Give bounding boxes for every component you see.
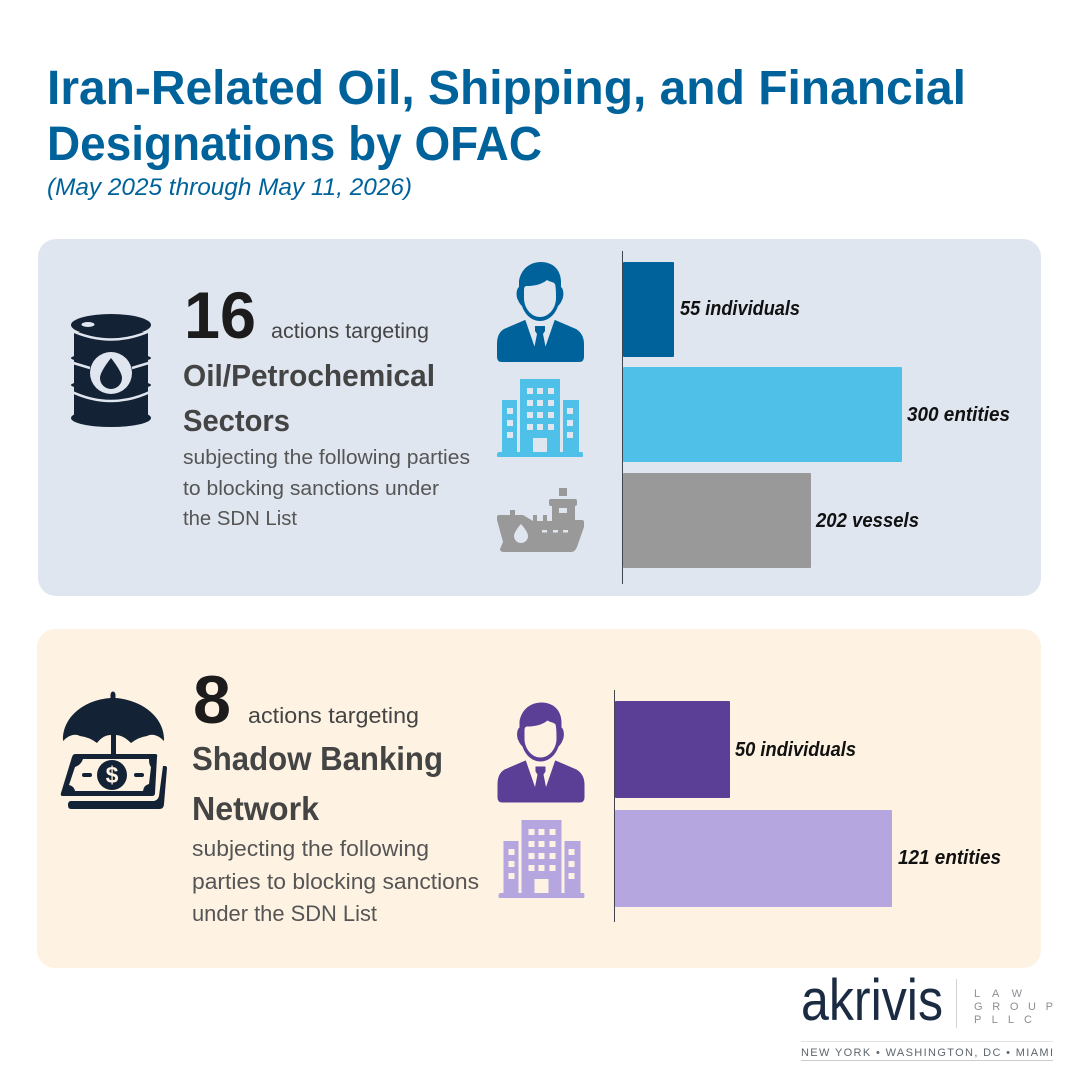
heading: shadow banking network: Network [192, 790, 320, 827]
heading: oil and petrochemical sectors [183, 358, 435, 438]
text block: oil description: the SDN List [183, 508, 297, 530]
text block: oil description: subjecting the following parties [183, 447, 470, 469]
icon: umbrella over money: $ [106, 762, 119, 788]
icon: individual person purple [498, 702, 584, 802]
text block: banking description: subjecting the following [192, 836, 429, 861]
panel: shadow banking network [37, 629, 1041, 968]
logo: akrivis law group [801, 968, 1053, 1061]
icon: umbrella over money [61, 692, 167, 809]
stat: 16 actions: actions targeting [271, 320, 429, 343]
bar: 202 vessels: 202 vessels [815, 510, 919, 532]
icon: entities building blue [497, 379, 583, 457]
bar: 121 entities [615, 810, 1001, 907]
text block: oil description: to blocking sanctions under [183, 478, 439, 500]
icon: entities building purple [498, 820, 584, 898]
title: Designations by OFAC [47, 118, 542, 171]
heading: oil and petrochemical sectors: Oil/Petrochemical [183, 358, 435, 393]
logo: akrivis law group: P L L C [974, 1014, 1032, 1026]
text block: banking description: under the SDN List [192, 901, 377, 926]
bar: 55 individuals: 55 individuals [680, 298, 800, 320]
stat: 8 actions: 8 [193, 662, 231, 738]
icon: oil barrel [70, 314, 152, 427]
bar: 300 entities: 300 entities [907, 404, 1010, 426]
bar: 50 individuals [615, 701, 856, 798]
bar: 300 entities [623, 367, 1010, 462]
heading: shadow banking network: Shadow Banking [192, 740, 443, 777]
text block: banking description: parties to blocking sanctions [192, 869, 479, 894]
icon: individual person blue [497, 262, 584, 362]
subtitle: (May 2025 through May 11, 2026) [47, 174, 412, 201]
title [47, 62, 966, 171]
bar: 55 individuals [623, 262, 800, 357]
stat: 8 actions: actions targeting [248, 703, 419, 728]
logo: akrivis law group: akrivis [801, 968, 943, 1033]
bar chart: oil designations [622, 251, 1010, 584]
bar chart: banking designations [614, 690, 1001, 922]
text block: banking description [192, 836, 479, 926]
stat: 8 actions [193, 662, 419, 738]
stat: 16 actions: 16 [184, 278, 256, 352]
logo: akrivis law group: L A W [974, 988, 1023, 1000]
bar: 202 vessels [623, 473, 919, 568]
text block: oil description [183, 447, 470, 530]
icon: vessel ship gray [497, 488, 584, 552]
logo: akrivis law group: G R O U P [974, 1001, 1053, 1013]
panel: oil and petrochemical sectors [38, 239, 1041, 596]
heading: shadow banking network [192, 740, 443, 827]
bar: 121 entities: 121 entities [898, 847, 1001, 869]
logo: akrivis law group: NEW YORK • WASHINGTON, DC • MIAMI [801, 1047, 1053, 1059]
heading: oil and petrochemical sectors: Sectors [183, 403, 290, 438]
bar: 50 individuals: 50 individuals [735, 739, 856, 761]
stat: 16 actions [184, 278, 429, 352]
title: Iran-Related Oil, Shipping, and Financial [47, 62, 966, 115]
